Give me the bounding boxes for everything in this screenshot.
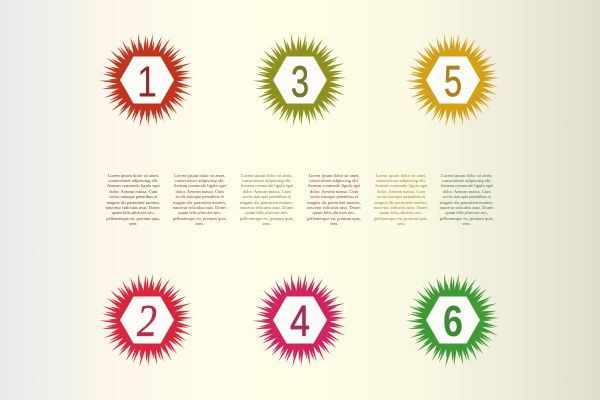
text block 1: sem. <box>129 221 137 226</box>
text block 5: quam felis,ultricies nec, <box>380 210 422 215</box>
badge 3: 3 <box>291 58 309 106</box>
text block 4: nascetur ridiculus mus. Donec <box>307 205 361 210</box>
text block 1: Aenean commodo ligula eget <box>107 183 160 188</box>
text block 1: nascetur ridiculus mus. Donec <box>106 205 161 210</box>
text block 3: Lorem ipsum dolor sit amet, <box>241 172 292 178</box>
text block 2: pellentesque eu, pretium quis, <box>173 216 227 221</box>
text block 4: dolor. Aenean massa. Cum <box>310 189 358 194</box>
text block 1: sociis natoque penatibus et <box>109 194 157 199</box>
text block 2: nascetur ridiculus mus. Donec <box>172 205 227 210</box>
text block 4 <box>306 172 362 226</box>
text block 3: consectetuer adipiscing elit. <box>242 178 292 183</box>
text block 3: magnis dis parturient montes, <box>240 200 293 205</box>
text block 3: sociis natoque penatibus et <box>242 194 291 199</box>
badge 2: 2 <box>137 296 157 346</box>
text block 2: sociis natoque penatibus et <box>176 194 224 199</box>
text block 4: sociis natoque penatibus et <box>310 194 358 199</box>
text block 5: sociis natoque penatibus et <box>377 194 425 199</box>
text block 5 <box>374 172 428 226</box>
text block 1: dolor. Aenean massa. Cum <box>109 189 157 194</box>
text block 1: consectetuer adipiscing elit. <box>108 178 158 183</box>
badge 4: 4 <box>290 297 310 346</box>
text block 6 <box>439 172 494 226</box>
badge 3 <box>246 26 351 133</box>
badge 1 <box>93 26 198 133</box>
text block 2: Aenean commodo ligula eget <box>173 183 226 188</box>
badge 5: 5 <box>444 57 462 106</box>
text block 3: dolor. Aenean massa. Cum <box>243 189 291 194</box>
text block 2: quam felis,ultricies nec, <box>178 210 221 215</box>
text block 5: Lorem ipsum dolor sit amet, <box>375 172 427 178</box>
text block 6: pellentesque eu, pretium quis, <box>440 216 494 221</box>
badge 4 <box>246 266 351 373</box>
text block 2 <box>172 172 227 226</box>
text block 4: consectetuer adipiscing elit. <box>309 178 359 183</box>
text block 6: magnis dis parturient montes, <box>440 200 493 205</box>
text block 6: sociis natoque penatibus et <box>442 194 491 199</box>
text block 3: nascetur ridiculus mus. Donec <box>239 205 294 210</box>
text block 5: Aenean commodo ligula eget <box>375 183 427 188</box>
badge 5 <box>399 26 504 133</box>
text block 3: sem. <box>262 221 271 226</box>
text block 3 <box>239 172 294 226</box>
text block 5: sem. <box>397 221 405 226</box>
text block 3: Aenean commodo ligula eget <box>240 183 293 188</box>
text block 6: quam felis,ultricies nec, <box>445 210 488 215</box>
text block 4: pellentesque eu, pretium quis, <box>307 216 361 221</box>
text block 5: nascetur ridiculus mus. Donec <box>374 205 428 210</box>
text block 4: magnis dis parturient montes, <box>307 200 361 205</box>
text block 5: dolor. Aenean massa. Cum <box>377 189 425 194</box>
badge 1: 1 <box>137 58 157 106</box>
text block 2: dolor. Aenean massa. Cum <box>176 189 224 194</box>
text block 6: dolor. Aenean massa. Cum <box>443 189 491 194</box>
text block 5: magnis dis parturient montes, <box>374 200 428 205</box>
text block 1: Lorem ipsum dolor sit amet, <box>108 172 159 178</box>
text block 4: sem. <box>330 221 338 226</box>
text block 3: quam felis,ultricies nec, <box>245 210 288 215</box>
text block 1 <box>106 172 161 226</box>
text block 5: consectetuer adipiscing elit. <box>376 178 426 183</box>
text block 4: quam felis,ultricies nec, <box>312 210 356 215</box>
text block 5: pellentesque eu, pretium quis, <box>374 216 428 221</box>
text block 1: magnis dis parturient montes, <box>107 200 160 205</box>
text block 6: Aenean commodo ligula eget <box>440 183 493 188</box>
text block 2: Lorem ipsum dolor sit amet, <box>174 172 225 178</box>
badge 6 <box>399 266 504 373</box>
badge 6: 6 <box>443 297 463 346</box>
text block 6: consectetuer adipiscing elit. <box>442 178 492 183</box>
text block 4: Aenean commodo ligula eget <box>308 183 360 188</box>
text block 2: magnis dis parturient montes, <box>173 200 226 205</box>
text block 6: nascetur ridiculus mus. Donec <box>439 205 494 210</box>
text block 3: pellentesque eu, pretium quis, <box>240 216 294 221</box>
badge 2 <box>93 266 198 373</box>
text block 1: pellentesque eu, pretium quis, <box>106 216 160 221</box>
text block 1: quam felis,ultricies nec, <box>112 210 155 215</box>
text block 2: consectetuer adipiscing elit. <box>175 178 225 183</box>
text block 2: sem. <box>196 221 204 226</box>
text block 6: Lorem ipsum dolor sit amet, <box>441 172 492 178</box>
text block 6: sem. <box>462 221 471 226</box>
text block 4: Lorem ipsum dolor sit amet, <box>308 172 360 178</box>
